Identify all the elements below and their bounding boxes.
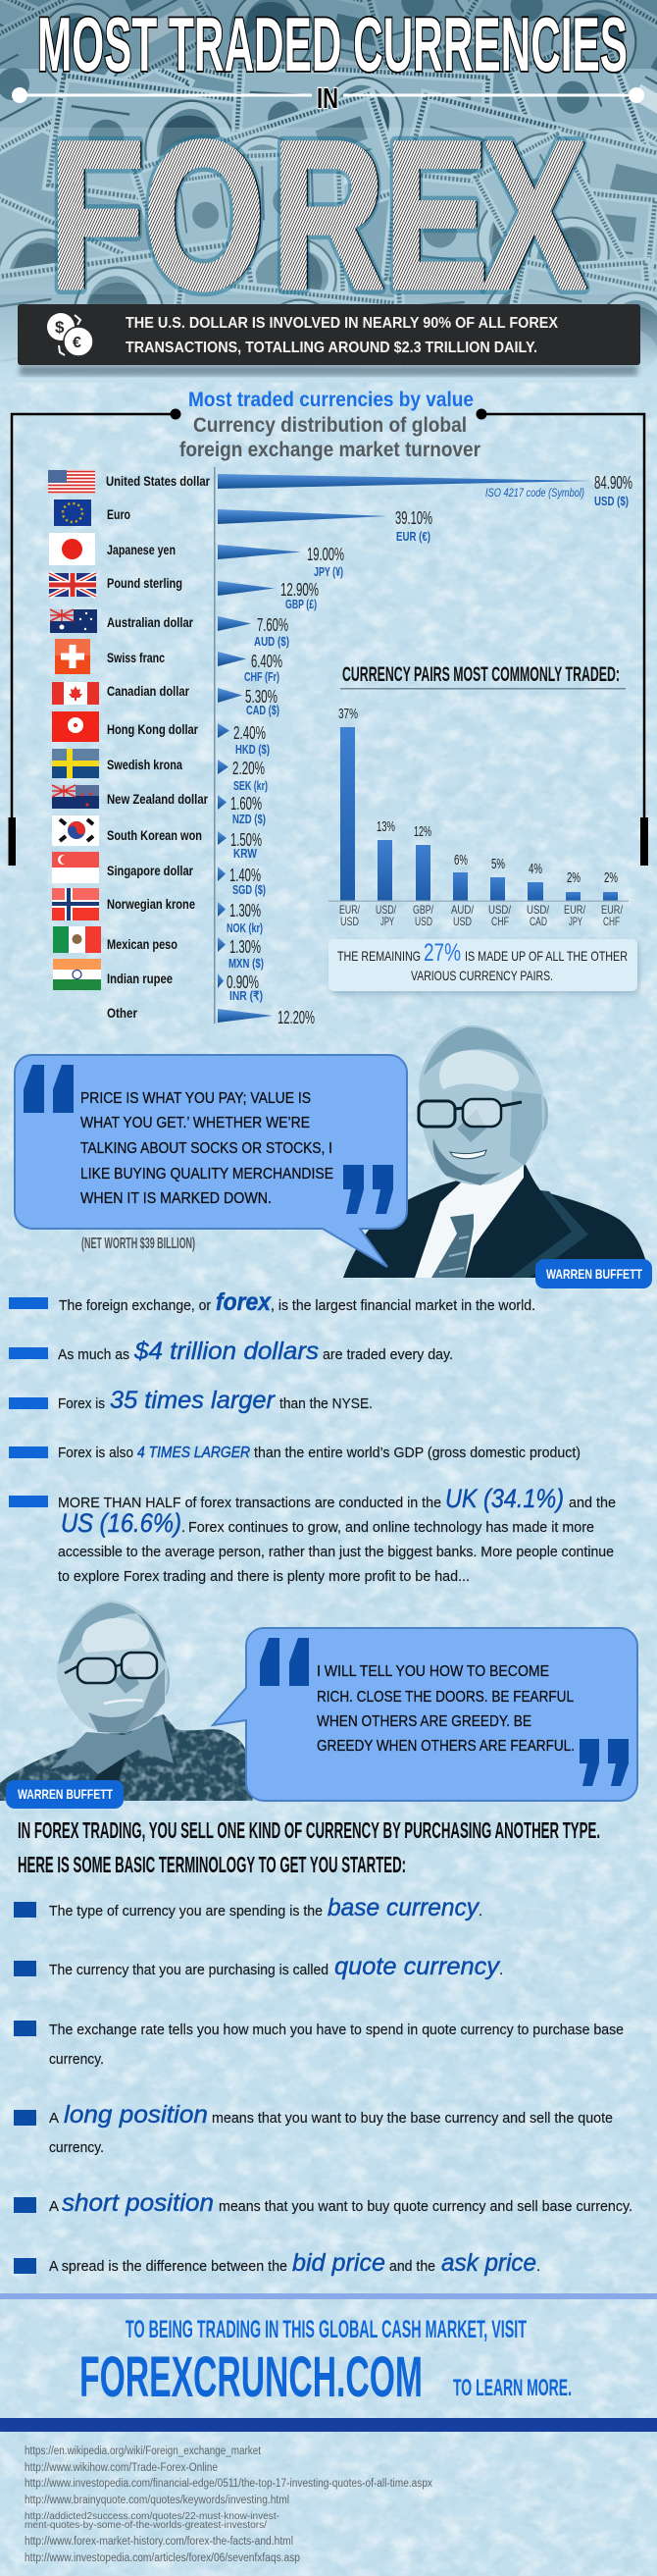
bar chart: currency pairs: EUR/ bbox=[564, 903, 586, 917]
portrait: Warren Buffett, left bbox=[0, 1601, 253, 1801]
term: base currency bbox=[14, 1894, 482, 1921]
row: Swiss franc bbox=[55, 639, 282, 684]
row: Swiss franc: 6.40% bbox=[251, 652, 282, 671]
fact: UK and US share bbox=[9, 1484, 616, 1585]
term: exchange rate bbox=[14, 2021, 624, 2068]
row: Euro: Euro bbox=[107, 507, 130, 522]
term: short position: means that you want to buy quote currency and sell base currency. bbox=[219, 2198, 632, 2215]
row: Swedish krona: 2.20% bbox=[232, 759, 265, 778]
sources list: http://www.brainyquote.com/quotes/keywords/investing.html bbox=[25, 2495, 289, 2506]
row: Mexican peso bbox=[53, 926, 264, 971]
call to action bbox=[79, 2316, 572, 2409]
icon: opening quote bbox=[260, 1638, 309, 1686]
panel frame bbox=[8, 408, 648, 866]
sources list: http://www.wikihow.com/Trade-Forex-Online bbox=[25, 2462, 218, 2474]
icon: dollar and euro coins: € bbox=[73, 335, 81, 351]
bar chart: currency pairs: JPY bbox=[380, 915, 394, 928]
bar chart: currency pairs: CAD bbox=[530, 915, 547, 928]
row: Japanese yen bbox=[49, 533, 344, 579]
bar chart: currency pairs: USD/ bbox=[488, 903, 512, 917]
term: quote currency: . bbox=[499, 1962, 503, 1978]
bar chart: currency pairs: USD/ bbox=[376, 903, 396, 917]
row: Mexican peso: MXN ($) bbox=[228, 957, 264, 971]
icon: Japan flag bbox=[49, 533, 95, 565]
row: Singapore dollar: Singapore dollar bbox=[107, 864, 194, 878]
row: Indian rupee: 0.90% bbox=[227, 973, 259, 992]
row: Australian dollar: AUD ($) bbox=[254, 635, 289, 649]
title: FOREX hatched lettering: FOREX bbox=[49, 98, 586, 332]
bar chart: currency pairs: AUD/ bbox=[451, 903, 475, 917]
fact: UK and US share: MORE THAN HALF of forex transactions are conducted in the bbox=[58, 1495, 441, 1511]
bar chart: currency pairs: USD bbox=[453, 915, 472, 928]
bar chart: currency pairs: EUR/ bbox=[339, 903, 360, 917]
term: long position: means that you want to buy the base currency and sell the quote bbox=[212, 2110, 613, 2127]
icon: Canada flag bbox=[52, 682, 99, 705]
bar chart: currency pairs: CHF bbox=[603, 915, 620, 928]
speech bubble: price quote: LIKE BUYING QUALITY MERCHANDISE bbox=[80, 1166, 333, 1183]
bar chart: currency pairs: 2% bbox=[567, 869, 581, 886]
fact: 35 times larger: 35 times larger bbox=[110, 1387, 277, 1414]
icon: South Korea flag bbox=[52, 815, 99, 846]
row: South Korean won: South Korean won bbox=[107, 828, 202, 843]
term: spread: . bbox=[536, 2258, 540, 2275]
speech bubble: price quote: TALKING ABOUT SOCKS OR STOCKS, I bbox=[80, 1140, 332, 1157]
fact: UK and US share: US (16.6%) bbox=[61, 1508, 181, 1538]
row: Indian rupee: INR (₹) bbox=[229, 989, 263, 1003]
fact: 4 times larger than GDP bbox=[9, 1445, 581, 1461]
row: Indian rupee: Indian rupee bbox=[107, 972, 173, 986]
fact: UK and US share: . bbox=[181, 1519, 185, 1536]
bar chart: currency pairs: 12% bbox=[414, 823, 431, 840]
row: Pound sterling bbox=[49, 573, 319, 611]
heading: terminology intro bbox=[18, 1817, 600, 1877]
title: FOREX hatched lettering: FOREX bbox=[52, 98, 588, 332]
title divider with IN: IN bbox=[317, 83, 338, 115]
row: Other bbox=[107, 1006, 315, 1027]
row: Other: Other bbox=[107, 1006, 138, 1021]
speech bubble: price quote: WHAT YOU GET.’ WHETHER WE’RE bbox=[80, 1115, 310, 1131]
term: quote currency: The currency that you are purchasing is called bbox=[49, 1962, 328, 1978]
bar chart: currency pairs: USD bbox=[340, 915, 359, 928]
icon: Norway flag bbox=[52, 888, 99, 920]
icon: dollar and euro coins: $ bbox=[55, 318, 65, 337]
term: short position: short position bbox=[62, 2189, 214, 2217]
row: Euro: EUR (€) bbox=[396, 530, 430, 544]
row: Hong Kong dollar: HKD ($) bbox=[235, 743, 270, 757]
bar chart: currency pairs: 6% bbox=[454, 852, 468, 868]
callout: dark statistic bar bbox=[18, 304, 640, 376]
fact: 35 times larger: Forex is bbox=[58, 1395, 105, 1412]
row: Singapore dollar: SGD ($) bbox=[232, 883, 266, 897]
name tag: Warren Buffett bbox=[6, 1780, 124, 1809]
row: Swedish krona: Swedish krona bbox=[107, 758, 182, 772]
term: exchange rate: The exchange rate tells you how much you have to spend in quote currency to purchase base bbox=[49, 2022, 624, 2038]
term: quote currency: quote currency bbox=[334, 1953, 501, 1980]
divider band bbox=[0, 2293, 657, 2299]
row: New Zealand dollar: New Zealand dollar bbox=[107, 792, 209, 807]
chart heading: foreign exchange market turnover bbox=[179, 439, 480, 461]
fact: UK and US share: and the bbox=[569, 1495, 616, 1511]
speech bubble: greedy quote: WHEN OTHERS ARE GREEDY. BE bbox=[317, 1713, 531, 1730]
row: Swedish krona bbox=[52, 749, 268, 793]
bar chart: currency pairs: 37% bbox=[338, 706, 358, 722]
row: United States dollar bbox=[48, 470, 632, 508]
row: New Zealand dollar bbox=[52, 785, 266, 826]
callout: remaining 27%: THE REMAINING bbox=[337, 948, 421, 964]
title divider with IN bbox=[12, 83, 644, 115]
sources list: http://addicted2success.com/quotes/22-must-know-invest- bbox=[25, 2510, 279, 2522]
term: spread: and the bbox=[389, 2258, 435, 2275]
fact: 35 times larger bbox=[9, 1387, 373, 1414]
term: spread: A spread is the difference between the bbox=[49, 2258, 287, 2275]
fact: 4 times larger than GDP: Forex is also bbox=[58, 1445, 133, 1461]
name tag: Warren Buffett: WARREN BUFFETT bbox=[18, 1786, 113, 1802]
bar chart: currency pairs: GBP/ bbox=[413, 903, 433, 917]
speech bubble: price quote: PRICE IS WHAT YOU PAY; VALUE IS bbox=[80, 1090, 311, 1107]
term: long position: A bbox=[49, 2110, 59, 2127]
callout: remaining 27%: 27% bbox=[424, 939, 461, 967]
call to action: FOREXCRUNCH.COM bbox=[79, 2345, 423, 2409]
row: Australian dollar: 7.60% bbox=[257, 615, 288, 635]
row: Canadian dollar: 5.30% bbox=[245, 687, 278, 707]
row: Indian rupee bbox=[53, 959, 263, 1003]
fact: largest market: forex bbox=[216, 1288, 272, 1316]
row: Canadian dollar: Canadian dollar bbox=[107, 684, 190, 699]
callout: remaining 27%: VARIOUS CURRENCY PAIRS. bbox=[411, 968, 553, 983]
row: Singapore dollar: 1.40% bbox=[229, 866, 261, 885]
bar chart: currency pairs bbox=[328, 706, 629, 928]
term: long position: currency. bbox=[49, 2139, 104, 2156]
term: spread bbox=[14, 2249, 540, 2277]
fact: largest market: , is the largest financial market in the world. bbox=[271, 1297, 535, 1314]
fact: 4 trillion: are traded every day. bbox=[323, 1346, 453, 1363]
title: FOREX hatched lettering: FOREX bbox=[49, 98, 586, 332]
fact: 35 times larger: than the NYSE. bbox=[279, 1395, 373, 1412]
row: Mexican peso: 1.30% bbox=[229, 937, 261, 957]
row: Norwegian krone: Norwegian krone bbox=[107, 897, 195, 912]
portrait: Warren Buffett, right bbox=[343, 1025, 645, 1278]
row: United States dollar: 84.90% bbox=[594, 473, 632, 493]
chart heading: Most traded currencies by value bbox=[188, 389, 474, 411]
speech bubble: price quote: WHEN IT IS MARKED DOWN. bbox=[80, 1190, 272, 1207]
icon: closing quote bbox=[580, 1739, 629, 1786]
row: Other: 12.20% bbox=[278, 1008, 315, 1027]
fact: largest market: The foreign exchange, or bbox=[59, 1297, 211, 1314]
bar chart: currency pairs: 2% bbox=[604, 869, 618, 886]
term: short position: A bbox=[49, 2198, 59, 2215]
net worth note: (NET WORTH $39 BILLION) bbox=[81, 1235, 195, 1252]
icon: UK flag bbox=[49, 573, 96, 597]
row: Swiss franc: CHF (Fr) bbox=[244, 670, 279, 684]
icon: Australia flag bbox=[50, 609, 97, 633]
bar chart: currency pairs: JPY bbox=[569, 915, 582, 928]
row: United States dollar: United States dollar bbox=[106, 474, 211, 489]
term: base currency: The type of currency you are spending is the bbox=[49, 1903, 323, 1919]
callout: dark statistic bar: THE U.S. DOLLAR IS INVOLVED IN NEARLY 90% OF ALL FOREX bbox=[126, 315, 559, 332]
term: long position: long position bbox=[64, 2101, 208, 2129]
term: base currency: base currency bbox=[328, 1894, 480, 1921]
chart heading bbox=[179, 389, 480, 461]
row: Singapore dollar bbox=[52, 852, 266, 897]
speech bubble: price quote bbox=[15, 1055, 407, 1267]
speech bubble: greedy quote: I WILL TELL YOU HOW TO BECOME bbox=[317, 1663, 549, 1680]
term: exchange rate: currency. bbox=[49, 2051, 104, 2068]
fact: largest market bbox=[9, 1288, 535, 1316]
chart heading: Currency distribution of global bbox=[193, 414, 467, 437]
icon: closing quote bbox=[343, 1165, 393, 1214]
row: Pound sterling: GBP (£) bbox=[285, 598, 317, 611]
icon: Switzerland flag bbox=[55, 639, 90, 674]
row: Pound sterling: Pound sterling bbox=[107, 576, 182, 591]
icon: EU flag bbox=[54, 499, 91, 526]
speech bubble: greedy quote: RICH. CLOSE THE DOORS. BE FEARFUL bbox=[317, 1689, 574, 1706]
fact: UK and US share: to explore Forex trading and there is plenty more profit to be had... bbox=[58, 1568, 470, 1585]
callout: dark statistic bar: TRANSACTIONS, TOTALLING AROUND $2.3 TRILLION DAILY. bbox=[126, 340, 537, 356]
row: Japanese yen: 19.00% bbox=[307, 545, 344, 564]
row: Swedish krona: SEK (kr) bbox=[233, 779, 268, 793]
footer band bbox=[0, 2418, 657, 2432]
term: spread: bid price bbox=[292, 2249, 385, 2277]
call to action: TO LEARN MORE. bbox=[453, 2375, 572, 2401]
bar chart: currency pairs: EUR/ bbox=[601, 903, 624, 917]
row: Euro: 39.10% bbox=[395, 508, 432, 528]
bar chart: currency pairs: 5% bbox=[491, 856, 505, 872]
bar chart: currency pairs: 13% bbox=[377, 818, 395, 835]
icon: dollar and euro coins bbox=[47, 313, 93, 356]
term: spread: ask price bbox=[441, 2249, 536, 2277]
name tag: Warren Buffett bbox=[535, 1259, 652, 1288]
term: long position bbox=[14, 2101, 613, 2156]
row: Euro bbox=[54, 499, 432, 544]
fact: 4 trillion: $4 trillion dollars bbox=[133, 1338, 319, 1365]
term: base currency: . bbox=[479, 1903, 482, 1919]
sources list: ment-quotes-by-some-of-the-worlds-greatest-investors/ bbox=[25, 2519, 267, 2531]
fact: 4 times larger than GDP: than the entire world’s GDP (gross domestic product) bbox=[254, 1445, 581, 1461]
row: United States dollar: USD ($) bbox=[594, 495, 629, 508]
row: South Korean won: KRW bbox=[233, 847, 257, 861]
icon: Sweden flag bbox=[52, 749, 99, 778]
bar chart: currency pairs: CHF bbox=[491, 915, 509, 928]
row: Norwegian krone: 1.30% bbox=[229, 901, 261, 920]
row: Hong Kong dollar bbox=[52, 711, 270, 757]
row: South Korean won bbox=[52, 815, 262, 861]
row: Canadian dollar bbox=[52, 682, 279, 717]
fact: 4 trillion: As much as bbox=[58, 1346, 129, 1363]
row: United States dollar: ISO 4217 code (Symbol) bbox=[485, 486, 584, 499]
row: Swiss franc: Swiss franc bbox=[107, 651, 165, 665]
row: Norwegian krone: NOK (kr) bbox=[227, 921, 263, 935]
row: Australian dollar: Australian dollar bbox=[107, 615, 194, 630]
icon: US flag bbox=[48, 470, 95, 494]
row: Hong Kong dollar: 2.40% bbox=[233, 723, 266, 743]
icon: opening quote bbox=[24, 1065, 74, 1113]
icon: India flag bbox=[53, 959, 101, 990]
row: New Zealand dollar: NZD ($) bbox=[232, 813, 266, 826]
sources list bbox=[25, 2445, 432, 2564]
bar chart: currency pairs: USD bbox=[415, 915, 432, 928]
row: Mexican peso: Mexican peso bbox=[107, 937, 177, 952]
icon: New Zealand flag bbox=[52, 785, 99, 809]
callout: remaining 27% bbox=[328, 939, 639, 994]
icon: Singapore flag bbox=[52, 852, 99, 883]
bar chart: currency pairs: 4% bbox=[529, 861, 542, 877]
row: South Korean won: 1.50% bbox=[230, 830, 262, 850]
fact: UK and US share: UK (34.1%) bbox=[445, 1484, 564, 1513]
icon: Mexico flag bbox=[53, 926, 101, 953]
term: short position bbox=[14, 2189, 632, 2217]
row: Japanese yen: Japanese yen bbox=[107, 543, 176, 557]
row: Australian dollar bbox=[50, 609, 289, 649]
fact: 4 trillion bbox=[9, 1338, 453, 1365]
icon: Hong Kong flag bbox=[52, 711, 99, 742]
bar chart: currency pairs: USD/ bbox=[527, 903, 550, 917]
fact: UK and US share: Forex continues to grow, and online technology has made it more bbox=[188, 1519, 594, 1536]
sources list: https://en.wikipedia.org/wiki/Foreign_exchange_market bbox=[25, 2445, 262, 2457]
sources list: http://www.investopedia.com/financial-edge/0511/the-top-17-investing-quotes-of-all-time.aspx bbox=[25, 2478, 432, 2490]
sources list: http://www.forex-market-history.com/forex-the-facts-and.html bbox=[25, 2536, 293, 2548]
header banknote collage bbox=[0, 0, 657, 419]
row: Canadian dollar: CAD ($) bbox=[246, 704, 279, 717]
fact: UK and US share: accessible to the average person, rather than just the biggest banks. More people continue bbox=[58, 1544, 614, 1560]
row: Japanese yen: JPY (¥) bbox=[314, 565, 343, 579]
speech bubble: greedy quote: GREEDY WHEN OTHERS ARE FEARFUL. bbox=[317, 1738, 575, 1755]
row: Hong Kong dollar: Hong Kong dollar bbox=[107, 722, 199, 737]
term: quote currency bbox=[14, 1953, 503, 1980]
chart axis bbox=[214, 467, 216, 1024]
fact: 4 times larger than GDP: 4 TIMES LARGER bbox=[137, 1445, 250, 1461]
row: New Zealand dollar: 1.60% bbox=[230, 794, 262, 814]
sources list: http://www.investopedia.com/articles/forex/06/sevenfxfaqs.asp bbox=[25, 2552, 300, 2564]
row: Pound sterling: 12.90% bbox=[280, 580, 319, 600]
speech bubble: greedy quote bbox=[213, 1628, 637, 1801]
row: Norwegian krone bbox=[52, 888, 263, 935]
